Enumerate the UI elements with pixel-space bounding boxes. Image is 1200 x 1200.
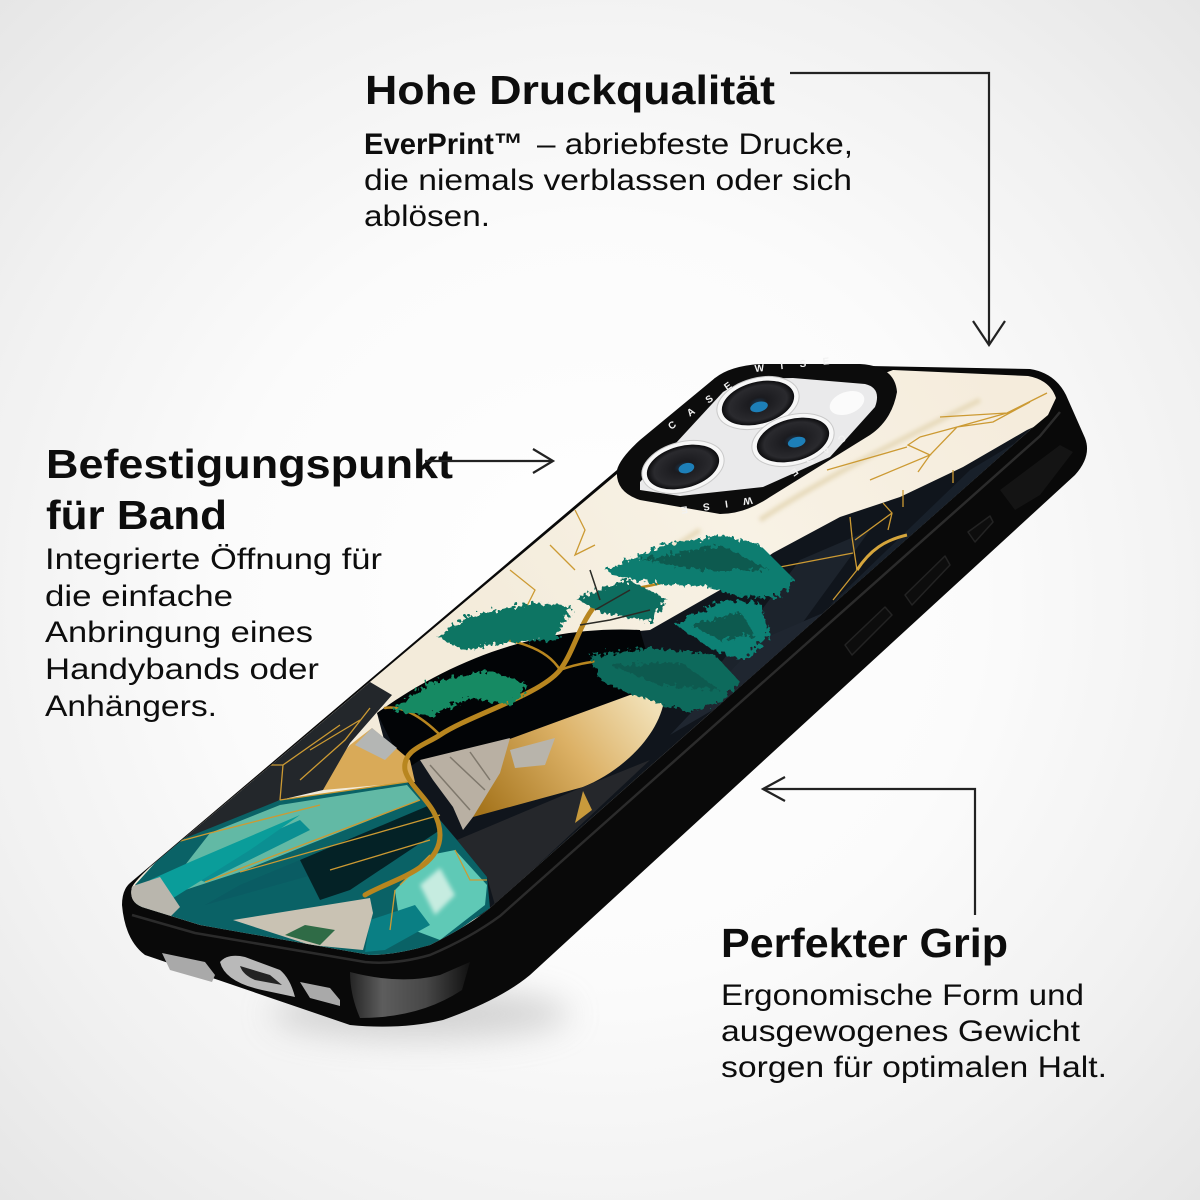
stones lower [130, 877, 180, 917]
body text: die niemals verblassen oder sich [364, 164, 852, 197]
rim highlight [132, 412, 1060, 963]
charging port [220, 956, 295, 997]
brand text top rim: C A S E [666, 380, 734, 432]
brand text lower rim 2: W I S E [680, 494, 753, 515]
body text: Anbringung eines [45, 616, 313, 649]
camera surround [617, 364, 897, 514]
brand text top rim 2: W I S E [754, 356, 830, 375]
volume up [905, 556, 950, 605]
printed artwork [120, 360, 1070, 960]
flash [826, 387, 868, 419]
arrow: to print surface [790, 73, 1005, 345]
mountain light faces [722, 530, 870, 672]
body text: sorgen für optimalen Halt. [721, 1051, 1107, 1084]
heading: Hohe Druckqualität [365, 67, 775, 113]
bottom sheen [350, 962, 470, 1018]
volume down [845, 607, 892, 655]
phone case illustration [120, 356, 1087, 1027]
tree trunk [365, 575, 680, 895]
body text: EverPrint™ [364, 128, 523, 161]
cream marble [120, 360, 1070, 960]
arrow: to strap point [425, 449, 553, 473]
heading: Perfekter Grip [721, 920, 1008, 966]
camera glass [640, 378, 877, 496]
gold triangle [575, 791, 592, 823]
body text: die einfache [45, 580, 233, 613]
branch dark lines [580, 570, 650, 625]
marble veins [672, 398, 982, 546]
stone texture [430, 752, 490, 810]
callout: print quality [364, 67, 853, 233]
phone shadow [270, 988, 570, 1040]
action button [968, 516, 993, 542]
body text: ablösen. [364, 200, 490, 233]
case body [122, 364, 1087, 1027]
lens top [711, 368, 805, 438]
thick gold crack [857, 535, 907, 570]
side grip ledge [1000, 445, 1073, 510]
teal rocks [135, 782, 490, 957]
heading: Befestigungspunkt [46, 441, 453, 487]
side buttons [845, 516, 993, 655]
moon disc dark [377, 630, 660, 770]
foreground shrubs [285, 925, 335, 945]
speaker left [162, 953, 215, 982]
marble stone centre [420, 738, 510, 830]
body text: – abriebfeste Drucke, [537, 128, 853, 161]
grey flakes [510, 738, 555, 768]
dark left region [150, 682, 392, 867]
callout: grip [721, 920, 1107, 1084]
dark lower underlayer [377, 415, 1060, 950]
dark lower right slab [457, 760, 650, 905]
body text: ausgewogenes Gewicht [721, 1015, 1081, 1048]
speaker right [300, 982, 340, 1006]
lens left [636, 432, 730, 502]
heading line 2: für Band [46, 492, 227, 538]
moon gold [473, 690, 665, 817]
callout: strap attachment [45, 441, 453, 723]
body text: Ergonomische Form und [721, 979, 1084, 1012]
brand text lower rim: C A S E [788, 432, 848, 478]
arrow: to case side [763, 777, 975, 915]
body text: Integrierte Öffnung für [45, 543, 382, 576]
foliage shading [610, 545, 770, 690]
body text: Handybands oder [45, 653, 319, 686]
body text [45, 543, 382, 723]
body text [721, 979, 1107, 1084]
foliage [392, 535, 795, 716]
body text [364, 128, 853, 233]
lens right [746, 405, 840, 475]
left gold facet [323, 728, 415, 790]
gold cracks [173, 393, 1047, 930]
body text: Anhängers. [45, 690, 217, 723]
